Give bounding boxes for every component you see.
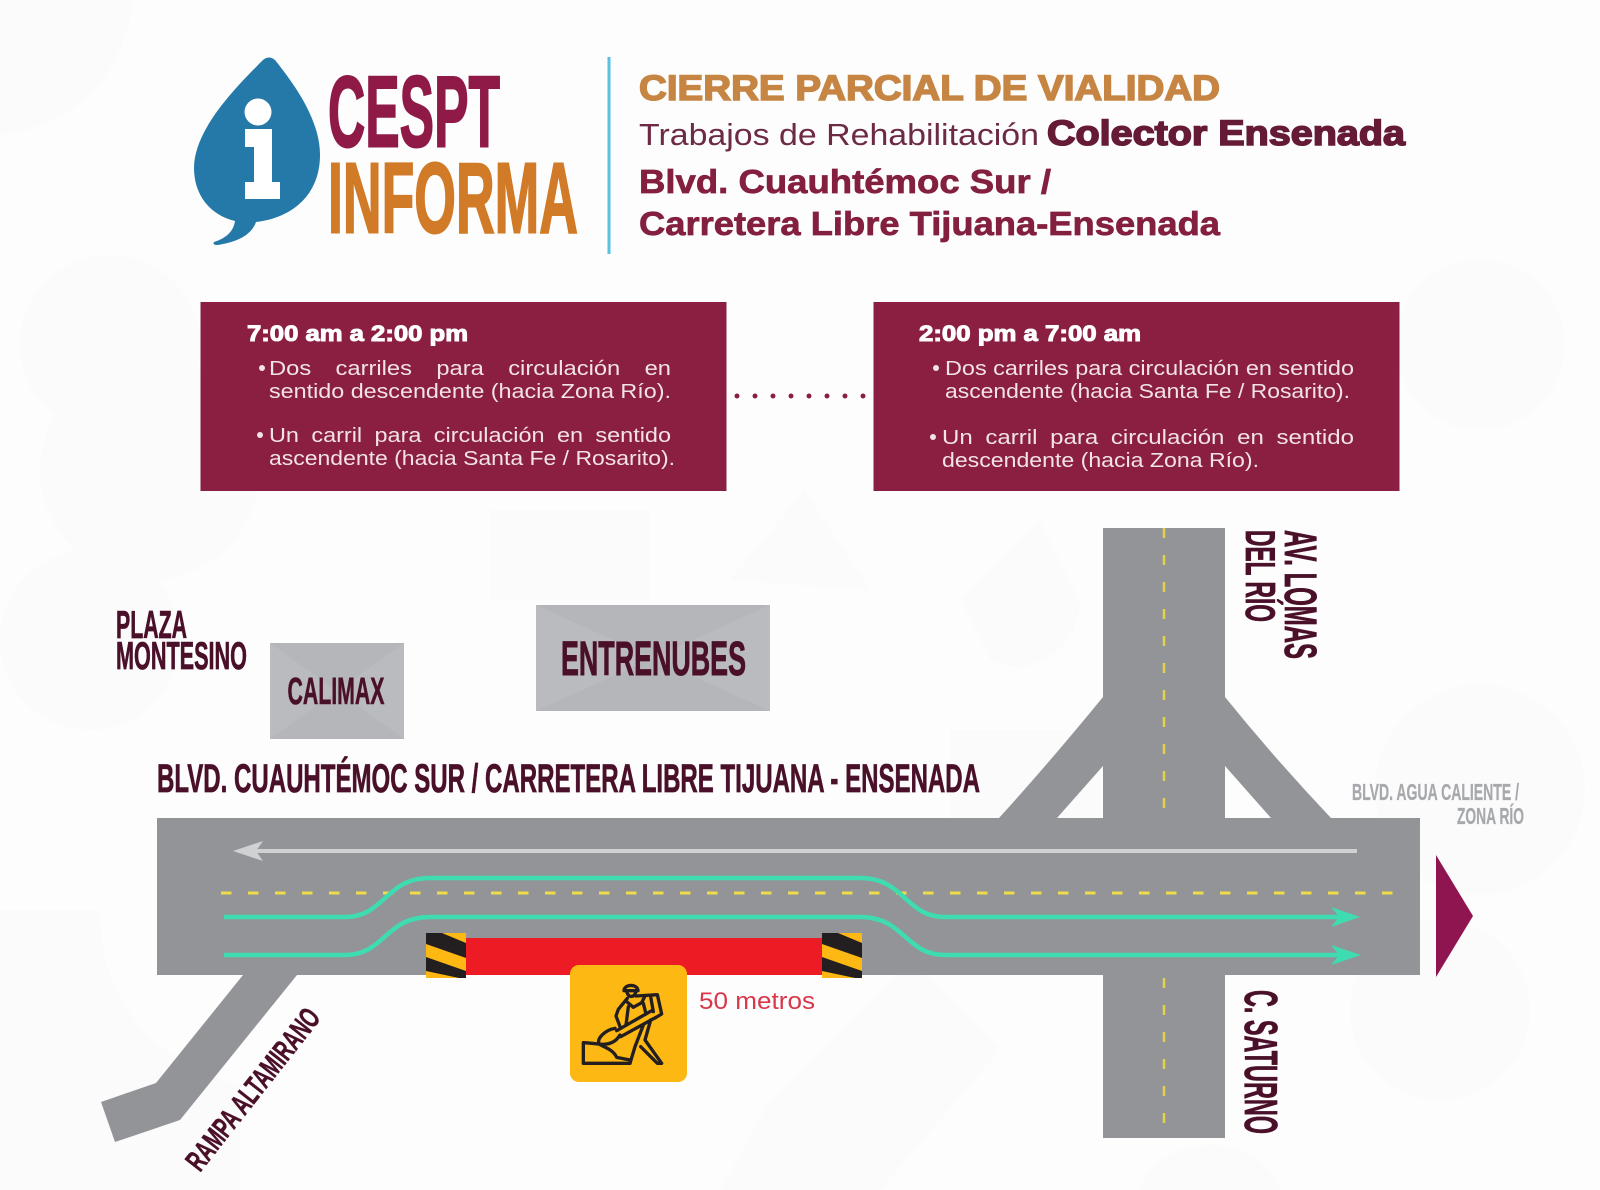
- arrow: detour lane upper: [224, 878, 1360, 927]
- arrow: direction triangle: [1436, 855, 1473, 977]
- building: Entrenubes: ENTRENUBES: [561, 633, 746, 686]
- logo word: INFORMA: INFORMA: [328, 142, 578, 254]
- bullet text 1: [259, 358, 671, 403]
- bullet text 2: ascendente (hacia Santa Fe / Rosarito).: [269, 448, 675, 470]
- road name label: BLVD. CUAUHTÉMOC SUR / CARRETERA LIBRE TIJUANA - ENSENADA: [157, 756, 980, 801]
- bullet text 2: [257, 425, 675, 470]
- panel: morning schedule: [200, 302, 726, 491]
- title block: [639, 69, 1406, 242]
- dotted connector: [734, 394, 866, 398]
- barrier: left hazard block: [426, 933, 466, 978]
- landmark label: Plaza Montesino: PLAZA: [116, 604, 187, 647]
- bullet text 2: Un carril para circulación en sentido: [269, 425, 671, 447]
- building: Calimax: CALIMAX: [288, 671, 385, 713]
- roads: asphalt network: [101, 528, 1420, 1142]
- bullet text 1: ascendente (hacia Santa Fe / Rosarito).: [945, 381, 1350, 403]
- panel: afternoon schedule: [874, 302, 1400, 491]
- label: Blvd Agua Caliente: ZONA RÍO: [1457, 802, 1524, 829]
- center line: horizontal: [221, 892, 1396, 894]
- label: closure length: 50 metros: [699, 988, 815, 1015]
- label: Av. Lomas del Río: AV. LOMAS: [1275, 530, 1326, 659]
- arrow: westbound lane: [233, 841, 1357, 861]
- panel heading: 2:00 pm a 7:00 am: [919, 321, 1141, 346]
- bullet text 2: Un carril para circulación en sentido: [942, 427, 1354, 449]
- location line 2: Carretera Libre Tijuana-Ensenada: [639, 205, 1221, 242]
- heading: closure: CIERRE PARCIAL DE VIALIDAD: [639, 69, 1220, 108]
- bullet text 1: sentido descendente (hacia Zona Río).: [269, 381, 671, 403]
- center line: north street: [1163, 528, 1165, 812]
- panel heading: 7:00 am a 2:00 pm: [247, 321, 468, 346]
- label: Av. Lomas del Río: [1237, 530, 1326, 659]
- logo word: CESPT: CESPT: [328, 56, 500, 168]
- bullet text 2: [930, 427, 1354, 472]
- barrier: right hazard block: [822, 933, 862, 978]
- bullet text 1: Dos carriles para circulación en sentido: [945, 358, 1354, 380]
- bullet text 1: [933, 358, 1354, 403]
- subheading: collector: Colector Ensenada: [1047, 114, 1406, 153]
- bullet text 1: Dos carriles para circulación en: [269, 358, 671, 380]
- building: Calimax: [270, 643, 404, 739]
- arrow: detour lane lower: [224, 917, 1361, 965]
- label: Blvd Agua Caliente: [1352, 779, 1524, 829]
- logo: CESPT Informa: [194, 56, 578, 254]
- building: Entrenubes: [536, 605, 770, 711]
- location line 1: Blvd. Cuauhtémoc Sur /: [639, 163, 1051, 200]
- icon: road works sign: [570, 965, 687, 1082]
- header divider: [608, 57, 610, 254]
- map: road diagram: [101, 528, 1524, 1177]
- label: Rampa Altamirano: RAMPA ALTAMIRANO: [180, 1002, 327, 1177]
- landmark label: Plaza Montesino: [116, 604, 247, 678]
- bullet text 2: descendente (hacia Zona Río).: [942, 450, 1259, 472]
- closed section: red bar: [466, 938, 822, 975]
- subheading: works: Trabajos de Rehabilitación: [639, 118, 1039, 152]
- icon: information water drop: [194, 58, 320, 245]
- landmark label: Plaza Montesino: MONTESINO: [116, 635, 247, 678]
- center line: south street: [1163, 978, 1165, 1126]
- label: Av. Lomas del Río: DEL RÍO: [1237, 530, 1284, 622]
